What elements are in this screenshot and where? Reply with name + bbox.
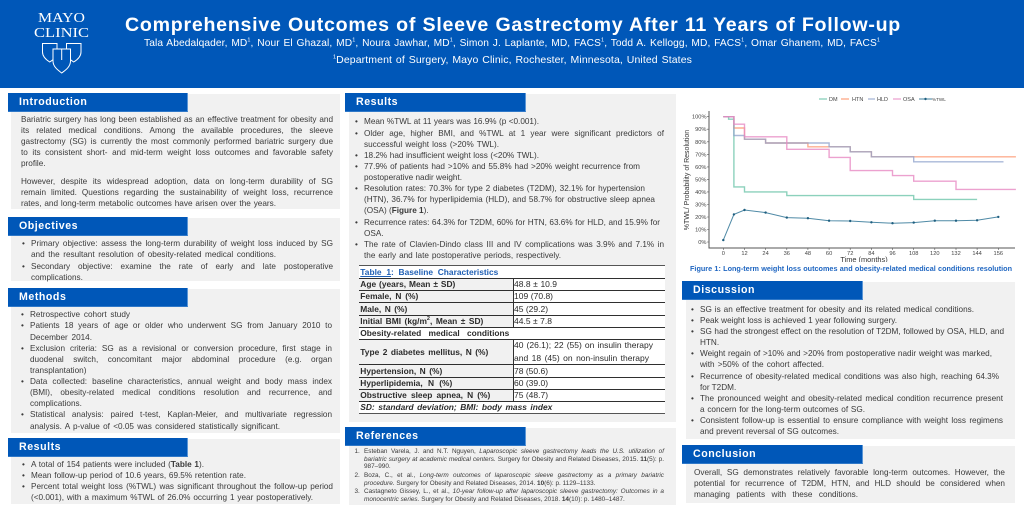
table rows: 78 (50.6) [514, 366, 548, 376]
text: results [22, 460, 333, 502]
heading: conclusion: Conclusion [693, 448, 756, 460]
y-axis tick labels: 10% [695, 228, 706, 234]
legend: DM [829, 97, 838, 103]
chart: long-term weight loss and resolution [684, 97, 1016, 262]
table rows [360, 279, 653, 412]
authors: Tala Abedalqader, MD1, Nour El Ghazal, MD1, Noura Jawhar, MD1, Simon J. Laplante, MD, FACS1, Todd A. Kellogg, MD, FACS1, Omar Ghanem, MD, FACS1 [144, 38, 880, 49]
text: results bullets: OSA. [364, 228, 384, 238]
table rows: Male, N (%) [360, 304, 407, 314]
panel: references: 2. [354, 472, 360, 479]
table rows: Hyperlipidemia, N (%) [360, 378, 452, 388]
text: results: A total of 154 patients were included (Table 1). [31, 460, 204, 468]
text: discussion: with >50% of the cohort affected. [700, 360, 824, 368]
y-axis tick labels: 100% [692, 115, 706, 121]
heading: objectives [8, 217, 188, 236]
text: introduction: However, despite its widespread adoption, data on long-term durability of SG [21, 176, 333, 186]
heading: introduction [8, 93, 188, 112]
title: Comprehensive Outcomes of Sleeve Gastrectomy After 11 Years of Follow-up [125, 14, 901, 36]
text: discussion: SG had the strongest effect on the resolution of T2DM, followed by OSA, HLD, and [700, 326, 1004, 336]
text: references: procedure. Surgery for Obesity and Related Diseases, 2014. 10(6): p. 1129–1133. [364, 480, 595, 487]
y-axis tick labels: 60% [695, 165, 706, 171]
y-axis tick labels: 40% [695, 190, 706, 196]
panel: references: 1. [354, 448, 360, 455]
heading: results: Results [356, 96, 398, 108]
table rows: Age (years, Mean ± SD) [360, 279, 455, 289]
table rows: 75 (48.7) [514, 390, 548, 400]
text: introduction: rates, and long-term metabolic outcomes have arisen over the years. [21, 198, 276, 208]
text: conclusion: potential for recurrence of T2DM, HTN, and HLD should be considered when [694, 478, 1005, 488]
heading: results [8, 438, 188, 456]
panel: references [345, 427, 676, 505]
text: methods: (BMI), obesity-related medical conditions resolution and recurrence, and [30, 388, 332, 396]
text: results bullets: Older age, higher BMI, and %TWL at 1 year were significant predictors of [364, 128, 664, 138]
x-axis tick labels: 96 [889, 251, 896, 257]
x-axis tick labels: 36 [784, 251, 790, 257]
affiliation: 1Department of Surgery, Mayo Clinic, Rochester, Minnesota, United States [333, 54, 692, 66]
y-axis tick labels: 0% [698, 240, 706, 246]
text: results bullets: the early and late postoperative periods, respectively. [364, 250, 561, 260]
text: discussion: for T2DM. [700, 382, 736, 392]
heading: introduction: Introduction [19, 96, 87, 108]
text: methods: Patients 18 years of age or older who underwent SG from January 2010 to [30, 320, 332, 330]
text: results bullets: Recurrence rates: 64.3% for T2DM, 60% for HTN, 63.6% for HLD, and 15.9% for [364, 218, 660, 226]
text: discussion: Peak weight loss is achieved 1 year following surgery. [700, 316, 897, 324]
series: DM [723, 117, 977, 199]
text: discussion: Consistent follow-up is essential to ensure compliance with weight loss regimens [700, 416, 1003, 424]
text: conclusion [694, 468, 1005, 498]
heading: methods: Methods [19, 291, 66, 303]
y-axis tick labels: 80% [695, 140, 706, 146]
text: results: Percent total weight loss (%TWL) was significant throughout the follow-up period [31, 482, 333, 490]
text: objectives: Secondary objective: examine the rate of early and late postoperative [31, 262, 333, 270]
x-axis tick labels: 72 [847, 251, 853, 257]
text: methods: Retrospective cohort study [30, 310, 130, 318]
series: OSA [723, 117, 1016, 189]
text: discussion [691, 304, 1004, 436]
axes and ticks [707, 111, 1015, 250]
panel: methods [8, 288, 340, 433]
text: discussion: SG is an effective treatment for obesity and its related medical conditions. [700, 304, 974, 314]
text: methods: December 2014. [30, 332, 92, 342]
y-axis title: %TWL/ Probability of Resolution [684, 130, 691, 230]
text: objectives: and the resultant resolution of obesity-related medical conditions. [31, 250, 276, 258]
legend: HLD [877, 97, 888, 103]
text: introduction: remain limited. Questions regarding the sustainability of weight loss, recurrence [21, 188, 333, 196]
text: introduction [21, 114, 333, 208]
text: results bullets: successful weight loss (>20% TWL). [364, 140, 499, 148]
legend: OSA [903, 97, 915, 103]
series: %TWL [722, 209, 1000, 241]
panel: objectives [8, 217, 340, 282]
table rows: 45 (29.2) [514, 304, 548, 314]
text: introduction: profile. [21, 158, 46, 168]
x-axis tick labels: 108 [909, 251, 918, 257]
y-axis tick labels: 90% [695, 127, 706, 133]
text: conclusion: managing patients with these conditions. [694, 490, 858, 498]
table rows: 48.8 ± 10.9 [514, 279, 557, 289]
panel: results (middle column) [345, 93, 676, 422]
text: discussion: a concern for the long-term outcomes of SG. [700, 404, 865, 414]
table rows: 60 (39.0) [514, 378, 548, 388]
text: references: Esteban Varela, J. and N.T. Nguyen, Laparoscopic sleeve gastrectomy leads the U.S. utilization of [364, 448, 664, 455]
text: results bullets: postoperative nadir weight. [364, 172, 462, 182]
text: references [354, 448, 665, 502]
text: results bullets: (HTN), 36.7% for hyperlipidemia (HLD), and 58.7% for obstructive sleep apnea [364, 194, 655, 204]
text: objectives [22, 238, 333, 282]
x-axis tick labels: 0 [722, 251, 725, 257]
text: results bullets [355, 116, 664, 260]
text: introduction: Bariatric surgery has long been established as an effective treatment for obesity and [21, 114, 333, 124]
panel: results (left column) [8, 438, 340, 504]
series: HTN [723, 117, 1016, 157]
text: methods: complications. [30, 398, 82, 408]
text: results bullets: 18.2% had insufficient weight loss (<20% TWL). [364, 150, 539, 160]
x-axis tick labels: 132 [951, 251, 961, 257]
logo: Mayo Clinic [34, 10, 89, 74]
legend [819, 97, 946, 103]
text: results bullets: 77.9% of patients had >10% and 55.8% had >20% weight recurrence from [364, 162, 640, 170]
y-axis tick labels: 30% [695, 202, 706, 208]
table rows: Initial BMI (kg/m2, Mean ± SD) [360, 316, 483, 326]
text: methods: duodenal switch, concomitant major abdominal procedure (e.g. organ [30, 354, 332, 364]
table rows: Hypertension, N (%) [360, 366, 442, 376]
legend: HTN [852, 97, 863, 103]
logo: Mayo Clinic: CLINIC [34, 25, 89, 40]
x-axis tick labels: 144 [972, 251, 982, 257]
text: results bullets: Mean %TWL at 11 years was 16.9% (p <0.001). [364, 116, 539, 126]
text: discussion: Recurrence of obesity-related medical conditions was also high, reaching 64.3% [700, 372, 999, 380]
x-axis tick labels [722, 251, 1003, 257]
text: methods: transplantation) [30, 366, 86, 374]
table title: Table 1: Baseline Characteristics [360, 267, 498, 277]
heading: discussion: Discussion [693, 284, 755, 296]
table rows: 44.5 ± 7.8 [514, 316, 552, 326]
text: references: Boza, C., et al., Long-term outcomes of laparoscopic sleeve gastrectomy as a primary bariatric [364, 472, 664, 479]
panel: references: 3. [354, 488, 360, 494]
heading: references: References [356, 430, 419, 442]
text: introduction: its related medical conditions. Among the available procedures, the sleeve [21, 126, 333, 134]
text: introduction: to its consistent short- and mid-term weight loss outcomes and favorable safety [21, 148, 333, 156]
heading: objectives: Objectives [19, 220, 78, 232]
y-axis tick labels: 70% [695, 152, 706, 158]
text: discussion: HTN. [700, 338, 719, 346]
y-axis tick labels: 20% [695, 215, 706, 221]
series: HLD [723, 117, 1004, 162]
table rows: and 18 (45) on non-insulin therapy [514, 353, 649, 363]
heading: results [345, 93, 526, 112]
panel: discussion [682, 281, 1015, 439]
text: references: 987–990. [364, 463, 391, 470]
heading: discussion [682, 281, 863, 300]
legend: %TWL [932, 97, 946, 102]
text: results bullets: (OSA) (Figure 1). [364, 206, 429, 214]
text: methods: Statistical analysis: paired t-test, Kaplan-Meier, and multivariate regression [30, 410, 332, 418]
text: references: Castagneto Gissey, L., et al., 10-year follow-up after laparoscopic sleeve gastrectomy: Outcomes in a [364, 488, 664, 494]
text: discussion: Weight regain of >10% and >20% from postoperative nadir weight was marked, [700, 348, 992, 358]
text: results bullets: Resolution rates: 70.3% for type 2 diabetes (T2DM), 32.1% for hypertension [364, 184, 645, 192]
text: discussion: The pronounced weight and obesity-related medical condition recurrence present [700, 394, 1003, 402]
heading: results: Results [19, 441, 61, 453]
panel: conclusion [682, 445, 1015, 503]
text: references: bariatric surgery at academic medical centers. Surgery for Obesity and Related Diseases, 2015. 11(5): p. [364, 456, 664, 462]
y-axis tick labels [692, 115, 706, 246]
x-axis tick labels: 48 [805, 251, 811, 257]
x-axis tick labels: 156 [994, 251, 1003, 257]
table rows: Obesity-related medical conditions [360, 328, 509, 338]
table rows: Female, N (%) [360, 291, 418, 301]
text: objectives: Primary objective: assess the long-term durability of weight loss induced by SG [31, 238, 333, 248]
heading: methods [8, 288, 188, 306]
table rows: Type 2 diabetes mellitus, N (%) [360, 347, 488, 357]
text: discussion: and prevent reversal of SG outcomes. [700, 426, 839, 436]
x-axis tick labels: 24 [762, 251, 769, 257]
table: baseline characteristics [359, 265, 665, 414]
text: methods: Exclusion criteria: SG as a revisional or conversion procedure, first stage in [30, 344, 332, 352]
text: conclusion: Overall, SG demonstrates relatively favorable long-term outcomes. However, the [694, 468, 1005, 476]
table rows: 40 (26.1); 22 (55) on insulin therapy [514, 340, 653, 350]
text: results: Mean follow-up period of 10.6 years, 69.5% retention rate. [31, 470, 246, 480]
heading: conclusion [682, 445, 863, 464]
text: methods [21, 310, 332, 430]
text: objectives: complications. [31, 272, 83, 282]
figure caption: Figure 1: Long-term weight loss outcomes and obesity-related medical conditions resolution [690, 264, 1012, 273]
logo: Mayo Clinic: MAYO [38, 10, 85, 25]
heading: references [345, 427, 526, 446]
x-axis tick labels: 120 [930, 251, 940, 257]
table rows: Obstructive sleep apnea, N (%) [360, 390, 490, 400]
text: methods: Data collected: baseline characteristics, annual weight and body mass index [30, 376, 332, 386]
x-axis tick labels: 84 [868, 251, 875, 257]
panel: introduction [8, 93, 340, 209]
text: methods: analysis. A p-value of <0.05 was considered statistically significant. [30, 422, 280, 430]
y-axis tick labels: 50% [695, 177, 706, 183]
header banner [0, 0, 1024, 88]
table rows: 109 (70.8) [514, 291, 553, 301]
text: results: (<0.001), with a maximum %TWL of 26.0% occurring 1 year postoperatively. [31, 492, 313, 502]
x-axis tick labels: 60 [826, 251, 832, 257]
x-axis tick labels: 12 [741, 251, 748, 257]
text: introduction: gastrectomy (SG) is currently the most commonly performed bariatric surgery due [21, 136, 333, 146]
table rows: SD: standard deviation; BMI: body mass index [360, 402, 552, 412]
text: references: monocentric series. Surgery for Obesity and Related Diseases, 2018. 14(10): p. 1480–1487. [364, 496, 625, 502]
text: results bullets: The rate of Clavien-Dindo class III and IV complications was 3.9% and 7.1% in [364, 240, 664, 248]
